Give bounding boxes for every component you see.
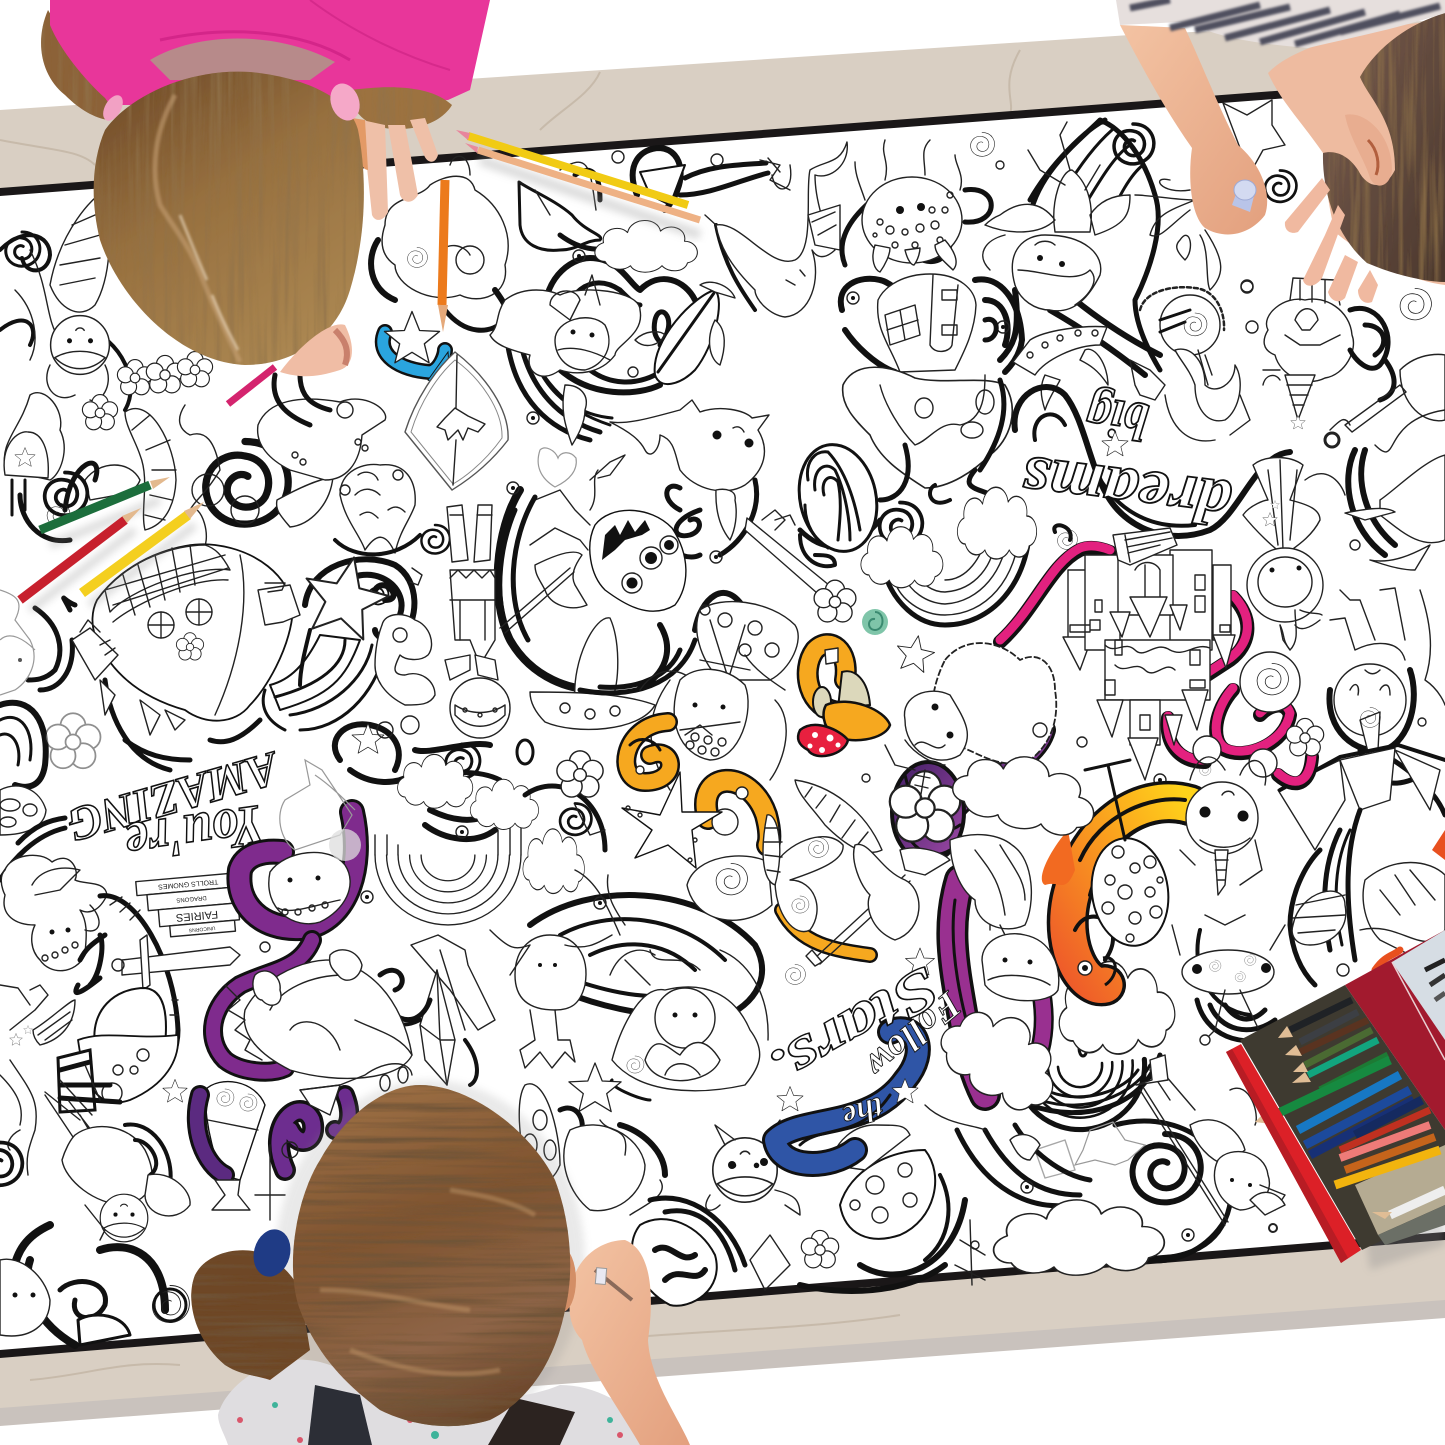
kid top left: shirt, hair and hands [41,0,490,404]
blue hair tie [248,1225,296,1281]
kid bottom: hair, arm and shirt [191,1080,690,1445]
books stack: DRAGONS [176,894,207,903]
pigtail [191,1250,310,1380]
horn with butterfly [687,780,882,932]
viking creature with spear [1136,1055,1285,1232]
striped shell [790,380,1030,566]
fingers [362,118,438,220]
grey pencil [1300,1012,1358,1042]
text: big dreams ribbon [1015,387,1290,536]
striped shirt [1116,0,1445,48]
big mushroom cap [843,367,1012,488]
white pencil [1390,1190,1445,1215]
big swirl and bat creature [180,405,333,555]
arm [570,1240,690,1445]
line art: left and centre [0,505,985,1345]
flower bunch and striped horn left [20,352,213,541]
yellow pencil [1335,1150,1440,1185]
dark navy pencil [1310,1100,1414,1155]
text: big dreams: dreams [1017,442,1235,540]
snail shell white [1240,652,1300,712]
orange pencil [442,180,445,305]
dragon bottom [225,950,430,1091]
unicorn fairy centre [640,620,786,790]
spotted mushroom [530,602,798,729]
dragon top [705,142,847,317]
pink pencil [1340,1125,1430,1158]
flower girl [983,120,1160,375]
skin neck and face [1268,20,1445,285]
troll tuft top [371,156,512,340]
head hair [94,72,364,365]
dark green pencil [1320,1055,1388,1090]
books stack: UNICORNS [188,925,216,933]
boat shape and swirl square [519,148,768,250]
text: Follow the: the [839,1090,888,1136]
text: big dreams [1017,384,1235,540]
loose colouring pencils top [438,130,700,332]
unicorn bottom [706,1120,839,1290]
unicorn creature right [1180,757,1266,895]
coloured section: magenta ribbons [1000,546,1324,783]
brown pencil [1300,1020,1368,1052]
star fish left cluster [0,985,75,1045]
teal pencil [1308,1040,1378,1075]
back hair pigtail left [41,10,120,120]
thin rainbow with clouds [375,754,605,925]
tendrils by hand [1135,179,1253,292]
alien [1172,915,1349,1045]
navy pencil short [1355,1100,1422,1135]
three eyed monster [590,510,686,611]
key and flower [745,510,856,622]
axe [806,844,919,966]
troll with fluffy hair and purple ribbon [885,643,1087,875]
box tray [1240,985,1445,1250]
pink shirt [50,0,490,105]
red pencil [20,520,125,600]
floral shirt [218,1360,660,1445]
house on mushroom [841,274,1022,372]
green pencil [40,485,150,530]
star and cyan ribbon [383,312,450,385]
coloured section: blue ribbon and text Follow the Stars [758,954,970,1164]
ear [548,1248,576,1312]
yellow pencil [468,136,688,205]
text: Follow the: Follow [858,982,970,1086]
red box spine [1226,1044,1361,1263]
bunny face lower right [1329,588,1445,815]
cloud top [595,221,697,272]
spotted egg mushroom bottom centre [519,1084,745,1306]
crystal [388,935,495,1085]
peach pencil [478,150,700,220]
rainbow and clouds centre right [861,485,1037,625]
corner star and swirl [1223,100,1296,202]
coloured section: purple ribbon lower [906,835,1075,1130]
purple ring with creature [213,760,373,1072]
pencils in box [1268,1000,1445,1215]
fingers [1285,178,1378,303]
troll with lily [569,950,805,1112]
green pencil long [1268,1060,1390,1118]
blue pencil [1298,1075,1400,1130]
fluffy pets centre left [258,375,450,554]
flower on ribbon [890,771,960,842]
black swirl arcs [957,1121,1231,1261]
orange mushroom top [798,644,890,782]
books stack: FAIRIES [175,908,218,923]
marker [1232,183,1256,212]
fluffy hair [933,643,1056,764]
olive pencil [1305,1030,1372,1065]
right pigtail [350,87,452,129]
mushroom with egg left [45,988,178,1140]
cow in hood [490,275,641,445]
black pencil [1290,1000,1352,1030]
cloud over rainbow [947,743,1103,843]
text: Follow the [758,954,970,1136]
table shadow edge [0,1285,1445,1426]
line art: lower right [957,915,1349,1280]
left rings and grey flower [0,703,100,880]
books stack [136,872,245,939]
thick arc with sword [76,896,240,1075]
whale [610,400,769,557]
text: You're Amazing: You're [122,792,269,876]
yellow pencil [82,515,188,593]
pencil shadows [30,500,195,610]
blob creature [375,615,435,705]
coloured section: orange swirls and mushroom [622,644,890,955]
pink pencil [228,367,275,404]
table shadow around head [275,1080,585,1440]
starfish [622,772,722,868]
head hair [293,1085,570,1426]
text: You're Amazing: AMAZING [62,741,286,852]
cactus creature with star [4,393,64,515]
oval spirals near flower [517,740,605,835]
pink hair ties [99,92,127,124]
kid top right: shirt, arm and head [1116,0,1445,303]
ear [1345,114,1392,186]
mushroom house [28,544,300,770]
pencil shadow [480,160,700,235]
teal swirl and star [862,609,937,674]
overalls straps [308,1385,372,1445]
flags [1278,745,1445,850]
pencil tips [1255,1026,1392,1219]
rainbow lower cloud [1016,953,1179,1135]
lid pencils [1425,960,1445,1000]
arm and hand [1120,25,1267,234]
fluffy bird top right [1241,278,1431,447]
creature centre bottom [490,870,762,1068]
brown orange pencil [1345,1137,1435,1170]
castle [1063,528,1235,786]
books stack: TROLLS GNOMES [157,878,218,890]
red pencil [1340,1110,1430,1150]
girl with flowers left [1,855,107,971]
navy pencil [1305,1090,1410,1145]
grey heart and claws [530,448,625,550]
box lid [1345,930,1445,1130]
beetle wing [635,282,735,384]
loose colouring pencils left [20,477,204,610]
helmet band with claws [1013,327,1108,410]
pencil box [1226,930,1445,1270]
sides creatures bottom left [0,1060,190,1345]
spotted octopus [842,132,1004,272]
shield [405,352,508,490]
bottle balloon [163,1079,349,1220]
coloured section: fiery rainbow [947,743,1190,985]
line art: top band [0,100,1296,689]
heart loop centre [507,250,695,440]
line art: right side [1015,278,1445,985]
right edge dragon [1330,354,1445,570]
snail shell near magenta [1054,525,1077,549]
purple ribbon [955,730,1045,810]
ring centre and axe [498,482,745,689]
hair [1323,13,1445,282]
striped dragon right [1290,810,1445,985]
box shadow [1360,1175,1445,1270]
left face grey [0,590,35,695]
swirl cluster with starfish [335,716,500,782]
mushroom bottom [800,1125,985,1291]
seahorse in dotted ring [1130,287,1250,441]
bunny with plume [1243,458,1345,650]
lower hand [280,324,352,376]
text: big dreams: big [1082,384,1152,453]
troll face [904,691,967,760]
bunny girl top left [0,195,131,410]
orange swirl left [626,722,670,782]
sword boots and knight [445,505,510,738]
orange arc centre [706,781,870,955]
neck collar [150,38,335,80]
text: Stars.: Stars. [758,954,952,1103]
flying star with rainbow [263,549,422,730]
clouds lower [991,1195,1166,1280]
